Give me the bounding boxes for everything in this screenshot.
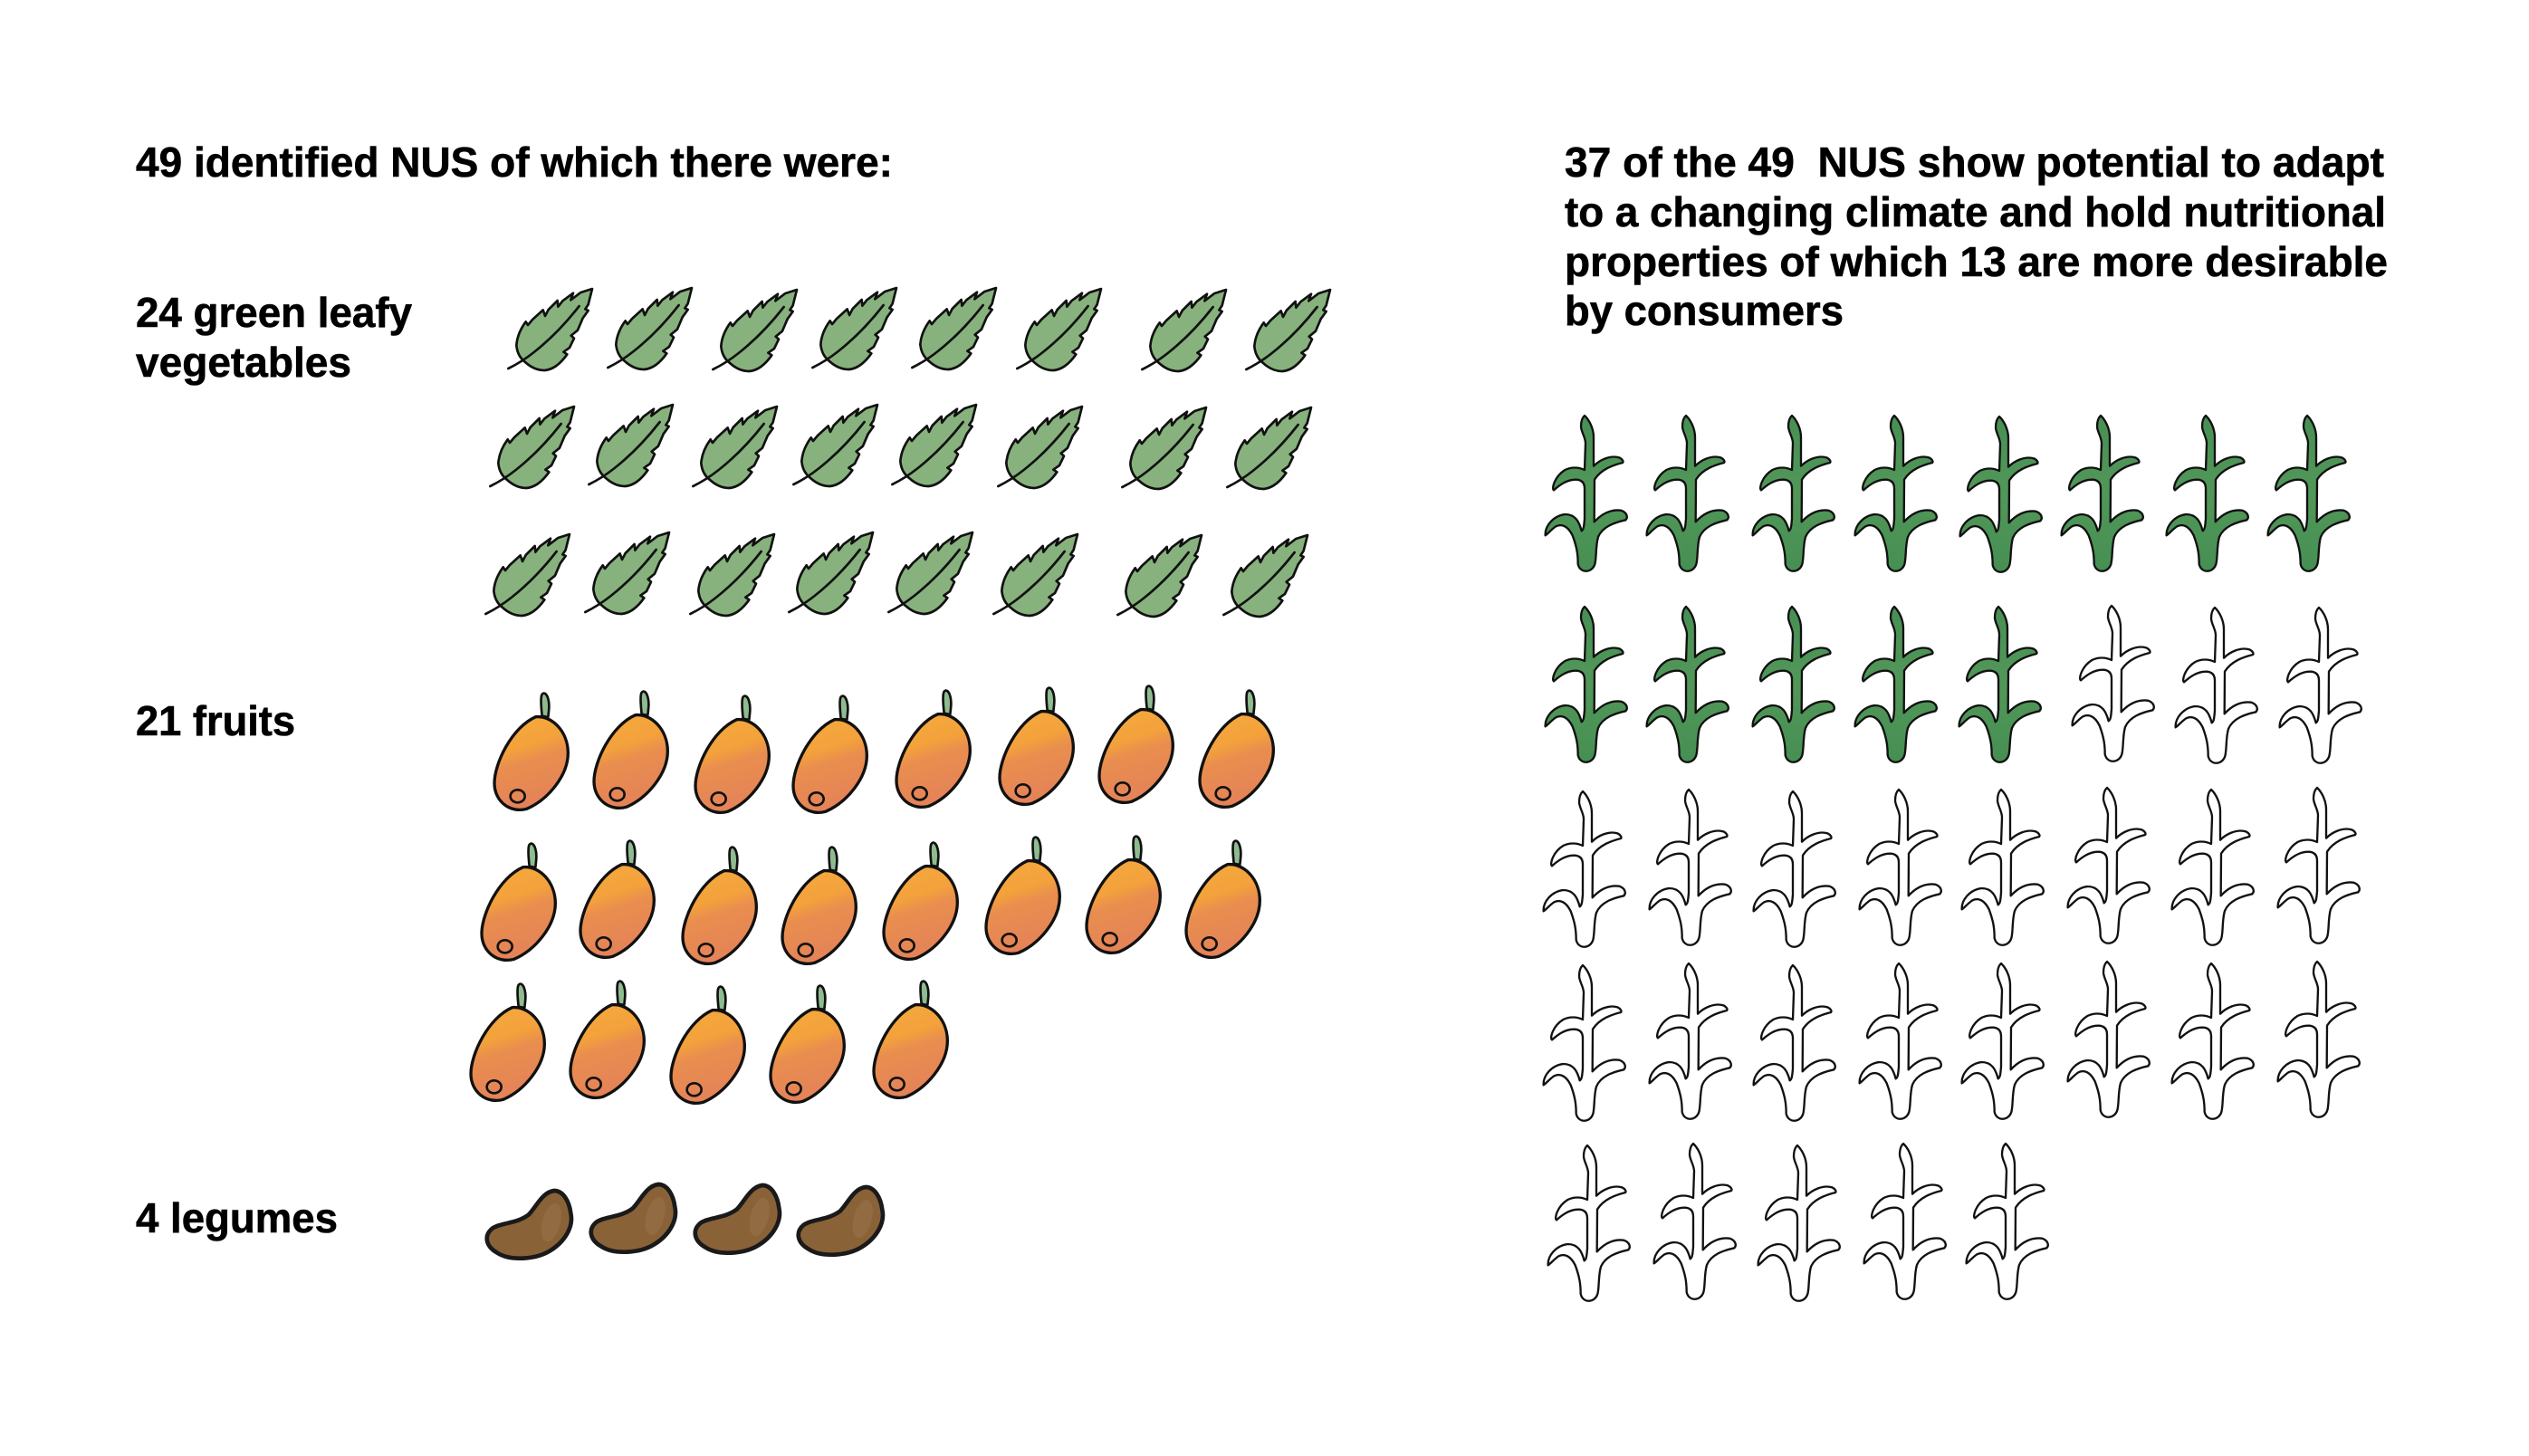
panel: 24 outline plants	[1544, 606, 2361, 1301]
icon row: fruits, second row of 8	[482, 837, 1260, 963]
heading: 37 of the 49 NUS	[1565, 139, 2388, 334]
icon row: fruits, third row of 5	[471, 982, 947, 1103]
icon row: fruits, first row of 8	[494, 686, 1273, 812]
icon row: green plants, first row of 8	[1546, 416, 2350, 572]
label: 24 green leafy vegetables: 24 green leafy	[136, 289, 412, 336]
icon row: leaves, second row of 8	[490, 405, 1311, 489]
heading: 49 identified NUS: 49 identified NUS of which there were:	[136, 139, 893, 186]
heading: 37 of the 49 NUS: properties of which 13 are more desirable	[1565, 238, 2388, 285]
panel: 13 green plants, more desirable	[1546, 416, 2350, 762]
icon row: green plants, second row of 5	[1546, 607, 2041, 762]
icon row: outline plants, fourth row of 8	[1544, 962, 2360, 1121]
icon row: outline plants, third row of 8	[1544, 788, 2360, 947]
icon row: leaves, third row of 8	[485, 532, 1308, 617]
heading: 37 of the 49 NUS: by consumers	[1565, 287, 1844, 334]
heading: 37 of the 49 NUS: to a changing climate and hold nutritional	[1565, 188, 2386, 235]
icon row: outline plants completing second row	[2073, 606, 2361, 763]
icon row: 4 legumes	[487, 1184, 883, 1259]
heading: 37 of the 49 NUS: 37 of the 49 NUS show potential to adapt	[1565, 139, 2384, 186]
panel: 21 fruit icons	[471, 686, 1273, 1103]
label: 21 fruits: 21 fruits	[136, 697, 295, 744]
icon row: outline plants, fifth row of 5	[1548, 1144, 2048, 1301]
panel: 24 green leaf icons	[485, 288, 1330, 617]
label: 4 legumes: 4 legumes	[136, 1194, 338, 1241]
label: 24 green leafy vegetables	[136, 289, 412, 386]
label: 24 green leafy vegetables: vegetables	[136, 339, 351, 386]
icon row: leaves, first row of 8	[508, 288, 1330, 371]
